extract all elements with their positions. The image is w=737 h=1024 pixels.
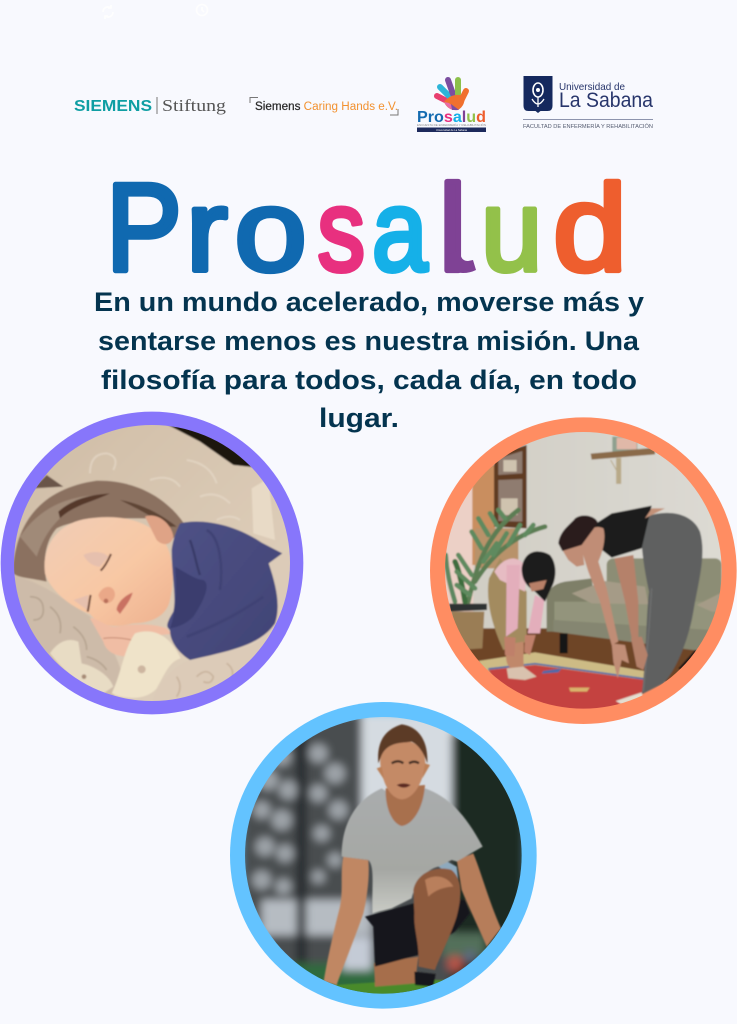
title: Prosalud: o xyxy=(234,167,307,296)
logo: Prosalud hand xyxy=(417,80,486,132)
title: Prosalud: P xyxy=(106,158,182,298)
text block: mission statement xyxy=(94,287,644,433)
text block: mission statement: sentarse menos es nuestra misión. Una xyxy=(98,326,640,356)
head xyxy=(380,740,425,799)
cabinet xyxy=(494,445,527,528)
sofa xyxy=(607,558,722,608)
text block: mission statement: filosofía para todos, cada día, en todo xyxy=(101,365,637,395)
logo: Siemens Stiftung: SIEMENS xyxy=(74,98,152,115)
logo: Universidad de La Sabana: FACULTAD DE ENFERMERÍA Y REHABILITACIÓN xyxy=(523,123,653,130)
partner logos row xyxy=(74,76,653,132)
logo: Prosalud hand: Prosalud xyxy=(417,109,486,126)
sweater xyxy=(167,522,282,660)
face xyxy=(45,517,173,626)
title letter l tail xyxy=(445,250,476,273)
bedding background xyxy=(10,420,297,707)
plush toy xyxy=(112,631,181,698)
logo: Universidad de La Sabana: La Sabana xyxy=(559,89,653,112)
neck xyxy=(386,785,425,826)
logo: Siemens Caring Hands: Siemens Caring Hands e.V. xyxy=(255,101,398,113)
far thigh and shin xyxy=(374,957,418,987)
photo circle: man in sprint start xyxy=(230,702,537,1009)
title: Prosalud: u xyxy=(481,166,542,295)
logo: Siemens Stiftung xyxy=(74,96,227,115)
text block: mission statement: lugar. xyxy=(319,403,399,433)
logo: Universidad de La Sabana xyxy=(523,76,653,130)
photo circle: sleeping child xyxy=(1,412,303,714)
shelf with picture xyxy=(612,437,637,452)
title: Prosalud: r xyxy=(186,166,228,295)
crest shield xyxy=(524,76,552,113)
text block: mission statement: En un mundo acelerado, moverse más y xyxy=(94,287,644,317)
ear xyxy=(145,515,173,544)
icon: faint clock symbol xyxy=(196,4,208,16)
blurred park background xyxy=(242,713,525,1000)
grass xyxy=(335,979,444,994)
logo: Prosalud hand: Universidad de La Sabana xyxy=(436,128,467,132)
title: Prosalud: d xyxy=(553,160,627,297)
hair xyxy=(378,724,427,763)
left arm xyxy=(324,857,369,985)
curtain and wood panel xyxy=(445,488,474,612)
girl xyxy=(488,551,555,680)
shoe xyxy=(414,972,436,987)
woman xyxy=(558,506,702,704)
pillow xyxy=(17,581,120,695)
right arm xyxy=(457,853,501,947)
hand xyxy=(90,618,172,656)
nose and mouth xyxy=(98,587,115,603)
shorts xyxy=(365,897,470,967)
photo circle: mother and daughter stretching xyxy=(430,417,737,724)
living room wall xyxy=(452,432,722,630)
title: Prosalud xyxy=(106,158,627,298)
blanket xyxy=(152,550,293,703)
logo: Siemens Caring Hands xyxy=(250,98,398,115)
plant and basket xyxy=(451,612,484,650)
closed eyes xyxy=(101,554,111,571)
eyelids xyxy=(83,552,108,567)
floor xyxy=(469,627,696,682)
rug xyxy=(478,652,645,680)
title: Prosalud: a xyxy=(372,165,428,295)
knee and shin xyxy=(413,869,460,970)
icon: faint refresh symbol xyxy=(103,5,113,19)
title: Prosalud: l xyxy=(438,160,467,297)
title: Prosalud: s xyxy=(318,167,365,296)
shirt xyxy=(342,788,483,913)
hair xyxy=(13,481,184,582)
logo: Siemens Stiftung: Stiftung xyxy=(162,96,227,115)
logo: Prosalud hand: ENCUESTA DE ENFERMERÍA Y REHABILITACIÓN xyxy=(417,122,486,127)
logo: Universidad de La Sabana: Universidad de xyxy=(559,81,625,93)
